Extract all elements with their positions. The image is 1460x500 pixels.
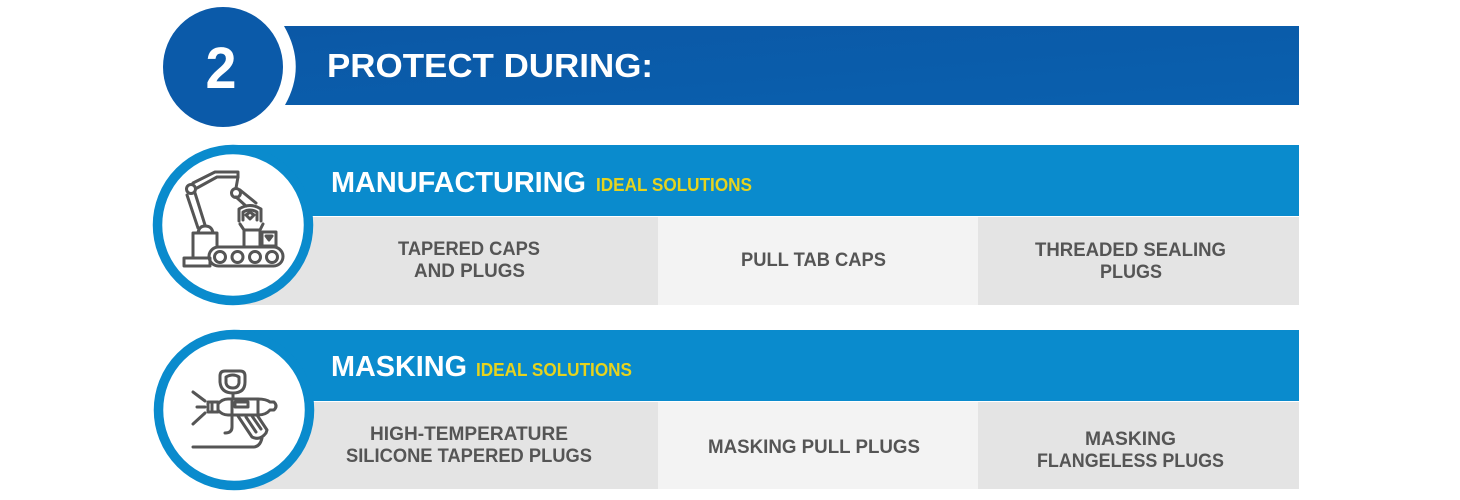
manufacturing solution cards — [233, 217, 1299, 305]
panel: protect during header — [163, 7, 1299, 127]
solution: high-temperature silicone tapered plugs — [346, 424, 592, 467]
manufacturing title bar — [233, 145, 1299, 216]
masking ideal solutions label: IDEAL SOLUTIONS — [476, 360, 632, 380]
solution: threaded sealing plugs: PLUGS — [1100, 262, 1162, 283]
masking title bar — [234, 330, 1299, 401]
manufacturing heading: MANUFACTURING — [331, 167, 586, 199]
masking heading: MASKING — [331, 351, 467, 383]
number badge — [163, 7, 283, 127]
panel: masking — [158, 330, 1299, 489]
solution: tapered caps and plugs — [398, 239, 540, 282]
solution: masking flangeless plugs: MASKING — [1085, 429, 1176, 450]
solution: threaded sealing plugs — [1035, 240, 1226, 283]
solution: tapered caps and plugs: TAPERED CAPS — [398, 239, 540, 260]
solution: masking pull plugs: MASKING PULL PLUGS — [708, 437, 920, 458]
solution: masking flangeless plugs: FLANGELESS PLUGS — [1037, 451, 1224, 472]
manufacturing ideal solutions label: IDEAL SOLUTIONS — [596, 175, 752, 195]
icon: robotic arm on conveyor — [158, 150, 308, 300]
solution: tapered caps and plugs: AND PLUGS — [414, 261, 525, 282]
solution: threaded sealing plugs: THREADED SEALING — [1035, 240, 1226, 261]
header banner — [284, 26, 1299, 105]
icon: spray gun — [158, 334, 310, 486]
heading: PROTECT DURING: — [327, 47, 653, 84]
masking solution cards — [234, 402, 1299, 489]
number badge: 2 — [206, 36, 236, 101]
solution: high-temperature silicone tapered plugs: HIGH-TEMPERATURE — [370, 424, 568, 445]
solution: high-temperature silicone tapered plugs: SILICONE TAPERED PLUGS — [346, 446, 592, 467]
solution: masking flangeless plugs — [1037, 429, 1224, 472]
solution: pull tab caps: PULL TAB CAPS — [741, 250, 886, 271]
panel: manufacturing — [158, 145, 1299, 305]
